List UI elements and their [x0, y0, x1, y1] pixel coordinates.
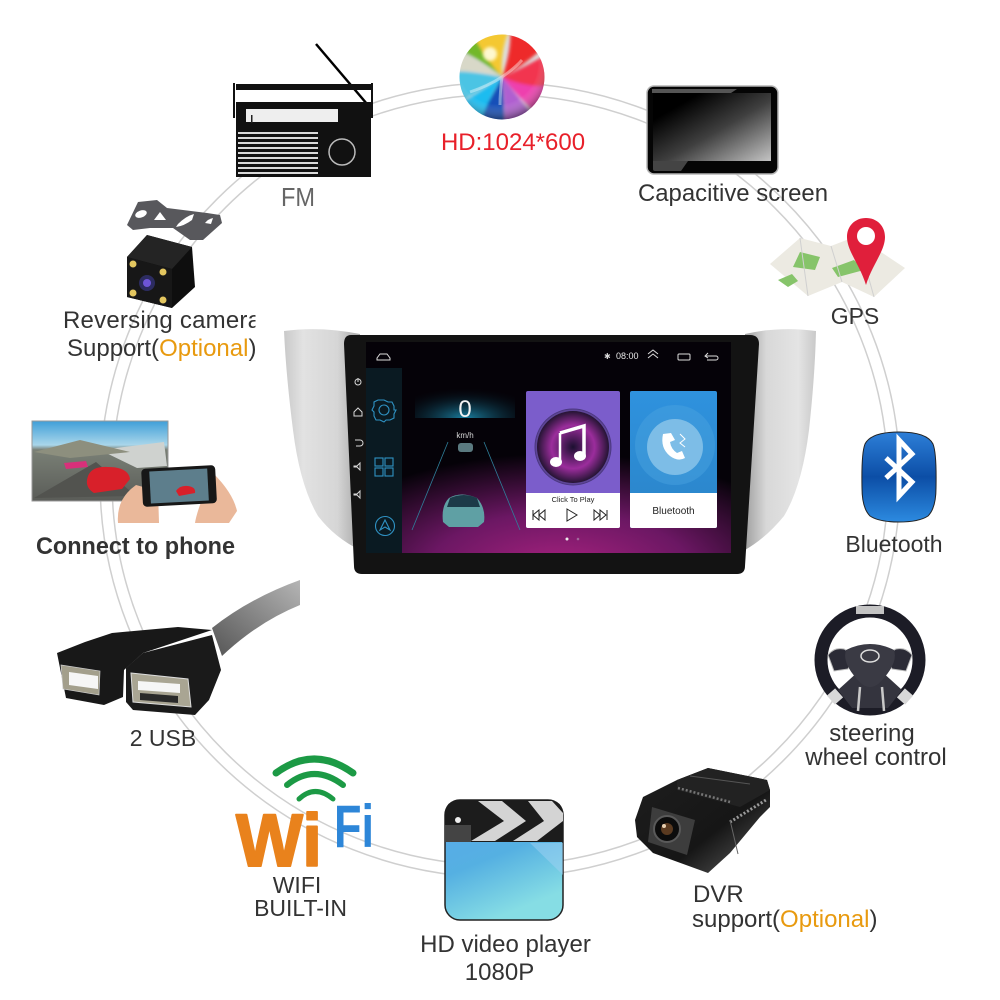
- icon: WiFi logo: Wi: [236, 799, 322, 882]
- label: HD video player 1080P: HD video player: [420, 931, 591, 958]
- speed readout: 0: [458, 396, 472, 423]
- feature: DVR: [635, 768, 877, 933]
- label: steering wheel control: steering: [829, 720, 915, 747]
- feature: 2 USB: [57, 580, 300, 751]
- feature: connect to phone: [32, 421, 237, 560]
- bezel: [344, 335, 759, 574]
- label: WIFI BUILT-IN: [254, 872, 347, 921]
- head unit product photo: [284, 329, 816, 574]
- icon: TV mirrored from phone: [32, 421, 237, 523]
- feature: Bluetooth: [845, 432, 943, 557]
- bluetooth card: [630, 391, 717, 528]
- feature: steering wheel control: [804, 610, 947, 771]
- label: FM: FM: [281, 182, 315, 212]
- icon: colour sphere: [460, 34, 544, 120]
- label: DVR support (Optional): DVR: [693, 881, 744, 908]
- icon: bluetooth badge: [862, 432, 936, 522]
- feature: HD resolution: [442, 34, 584, 150]
- feature: HD video player: [420, 800, 591, 986]
- label: Reversing camera Support (Optional): [64, 310, 256, 361]
- icon: WiFi logo: [236, 759, 374, 882]
- feature: capacitive screen: [638, 86, 828, 207]
- icon: WiFi logo: Fi: [334, 793, 374, 860]
- music card: Click To Play: [552, 495, 595, 504]
- label: 2 USB: 2 USB: [130, 725, 196, 751]
- icon: clapperboard: [445, 800, 563, 920]
- icon: tablet: [647, 86, 778, 174]
- status bar: [377, 350, 718, 361]
- icon: camera with bracket: [127, 200, 222, 308]
- label: steering wheel control: [804, 720, 947, 771]
- sidebar: [366, 368, 402, 553]
- bluetooth card: Bluetooth: [652, 506, 695, 517]
- label: Bluetooth: Bluetooth: [845, 531, 943, 557]
- feature: FM radio: [233, 44, 373, 212]
- silver left trim: [284, 329, 360, 550]
- label: Reversing camera Support (Optional): Reversing camera: [63, 307, 262, 334]
- feature: GPS: [770, 218, 905, 329]
- icon: radio: [233, 44, 373, 177]
- label: HD video player 1080P: 1080P: [465, 959, 534, 986]
- label: DVR support (Optional): [692, 881, 877, 933]
- label: Capacitive screen: Capacitive screen: [638, 180, 828, 207]
- road and cars: [412, 442, 520, 530]
- speed readout: [415, 378, 515, 440]
- status bar: 08:00: [616, 351, 639, 361]
- icon: dash camera: [635, 768, 770, 873]
- label: HD:1024*600: HD:1024*600: [441, 129, 585, 156]
- label: Reversing camera Support (Optional): Support(Optional): [67, 335, 256, 362]
- label: DVR support (Optional): support(Optional): [692, 906, 877, 933]
- label: HD video player 1080P: [420, 931, 591, 986]
- screen: [366, 342, 731, 553]
- label: GPS: GPS: [831, 303, 879, 329]
- label: steering wheel control: wheel control: [804, 744, 947, 771]
- icon: dual USB cable: [57, 580, 300, 715]
- icon: map with pin: [770, 218, 905, 297]
- silver right trim: [745, 329, 816, 550]
- speed readout: km/h: [456, 431, 474, 440]
- status bar: ✱: [604, 352, 611, 361]
- feature: reversing camera: [63, 200, 262, 362]
- feature: WiFi: [236, 759, 374, 921]
- page dots: [566, 538, 568, 540]
- label: WIFI BUILT-IN: BUILT-IN: [254, 895, 347, 921]
- icon: steering wheel: [821, 610, 919, 711]
- side bezel buttons: [354, 378, 363, 498]
- label: Connect to phone: Connect to phone: [36, 533, 235, 560]
- label: WIFI BUILT-IN: WIFI: [273, 872, 321, 898]
- feature ring: two concentric circles: [100, 82, 900, 878]
- music card: [526, 391, 620, 528]
- sidebar icons: [372, 400, 396, 536]
